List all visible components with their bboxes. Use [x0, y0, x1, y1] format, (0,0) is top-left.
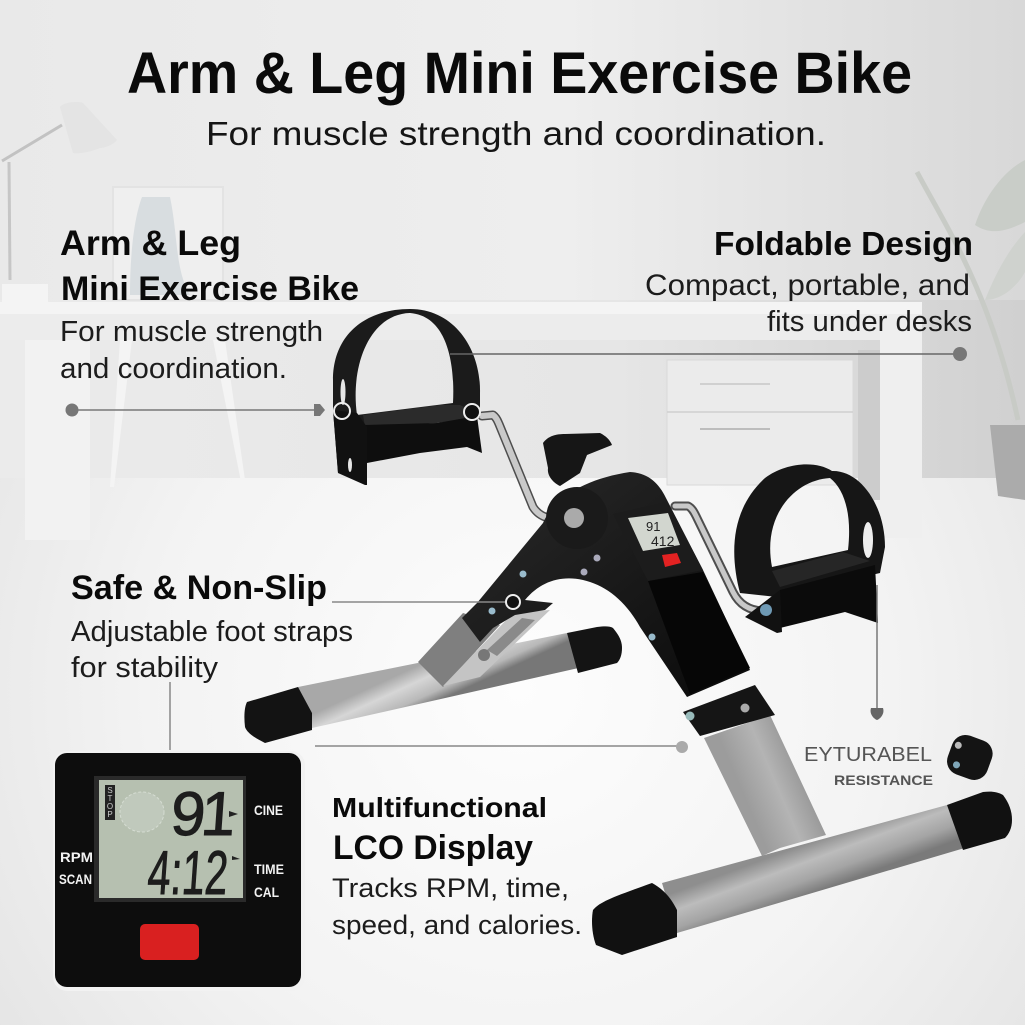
- callout: foldable design: [645, 225, 973, 338]
- bike: front foot tube: [592, 792, 1012, 955]
- LCD console close-up: [53, 751, 305, 991]
- LCD screen: 91: [169, 780, 238, 849]
- bike: front crank rod: [675, 506, 768, 611]
- subtitle: For muscle strength and coordination.: [206, 115, 826, 152]
- console labels: RPM: [60, 849, 93, 865]
- callout: LCD display: Tracks RPM, time,: [332, 873, 569, 903]
- leader line: LCD to monitor: [315, 741, 688, 753]
- bike: lower collar: [683, 685, 775, 736]
- callout: arm and leg bike: For muscle strength: [60, 316, 323, 348]
- callout: arm and leg bike: and coordination.: [60, 353, 287, 385]
- LCD screen: O: [107, 802, 113, 811]
- LCD screen: [94, 776, 246, 908]
- console labels: [59, 802, 284, 900]
- bike: rear crank rod: [482, 415, 578, 519]
- callout: arm and leg bike: [60, 224, 359, 385]
- bike: main body: [462, 472, 750, 697]
- callout: LCD display: [332, 792, 582, 940]
- callout: foldable design: Foldable Design: [714, 225, 973, 262]
- potted plant: [917, 160, 1025, 500]
- floor lamp: [2, 102, 117, 302]
- LCD screen: T: [108, 794, 113, 803]
- console labels: CINE: [254, 802, 283, 818]
- bike: right pedal with strap: [734, 464, 885, 633]
- callout: safe and non-slip: [71, 569, 353, 684]
- leader line: non-slip: [332, 595, 520, 609]
- LCD screen: 4:12: [146, 839, 230, 908]
- adjustable resistance knob: [943, 731, 997, 784]
- desk: [0, 302, 922, 540]
- leader line: resistance: [871, 585, 883, 720]
- callout: LCD display: speed, and calories.: [332, 910, 582, 940]
- callout: safe and non-slip: for stability: [71, 652, 219, 684]
- console labels: SCAN: [59, 871, 92, 887]
- bike: built-in monitor: 91: [646, 519, 660, 534]
- wall picture: [113, 187, 223, 300]
- callout: safe and non-slip: Safe & Non-Slip: [71, 569, 327, 607]
- bike: tension knob: [543, 433, 612, 486]
- resistance label: [804, 744, 933, 788]
- console labels: TIME: [254, 861, 284, 877]
- callout: LCD display: LCO Display: [333, 829, 533, 867]
- callout: foldable design: fits under desks: [767, 306, 972, 338]
- leader line: arm and leg: [66, 403, 350, 419]
- bike: built-in monitor: 412: [651, 533, 675, 549]
- resistance label: EYTURABEL: [804, 744, 932, 766]
- LCD screen: P: [107, 810, 113, 819]
- red button: [140, 924, 199, 960]
- callout: arm and leg bike: Mini Exercise Bike: [61, 270, 359, 308]
- bike: built-in monitor: [613, 502, 703, 581]
- leader line: to LCD panel: [169, 682, 171, 750]
- console labels: CAL: [254, 884, 279, 900]
- bike: folding bracket: [418, 610, 550, 687]
- bike: left pedal with strap: [333, 309, 482, 485]
- resistance label: RESISTANCE: [834, 772, 933, 788]
- leader line: foldable: [450, 347, 967, 420]
- bike: rear foot tube: [244, 626, 622, 743]
- callout: arm and leg bike: Arm & Leg: [60, 224, 241, 263]
- callout: foldable design: Compact, portable, and: [645, 269, 970, 302]
- title: Arm & Leg Mini Exercise Bike: [127, 41, 912, 106]
- callout: safe and non-slip: Adjustable foot straps: [71, 616, 353, 648]
- LCD screen: S: [107, 786, 113, 795]
- bike: upright tube: [704, 715, 826, 856]
- callout: LCD display: Multifunctional: [332, 792, 547, 823]
